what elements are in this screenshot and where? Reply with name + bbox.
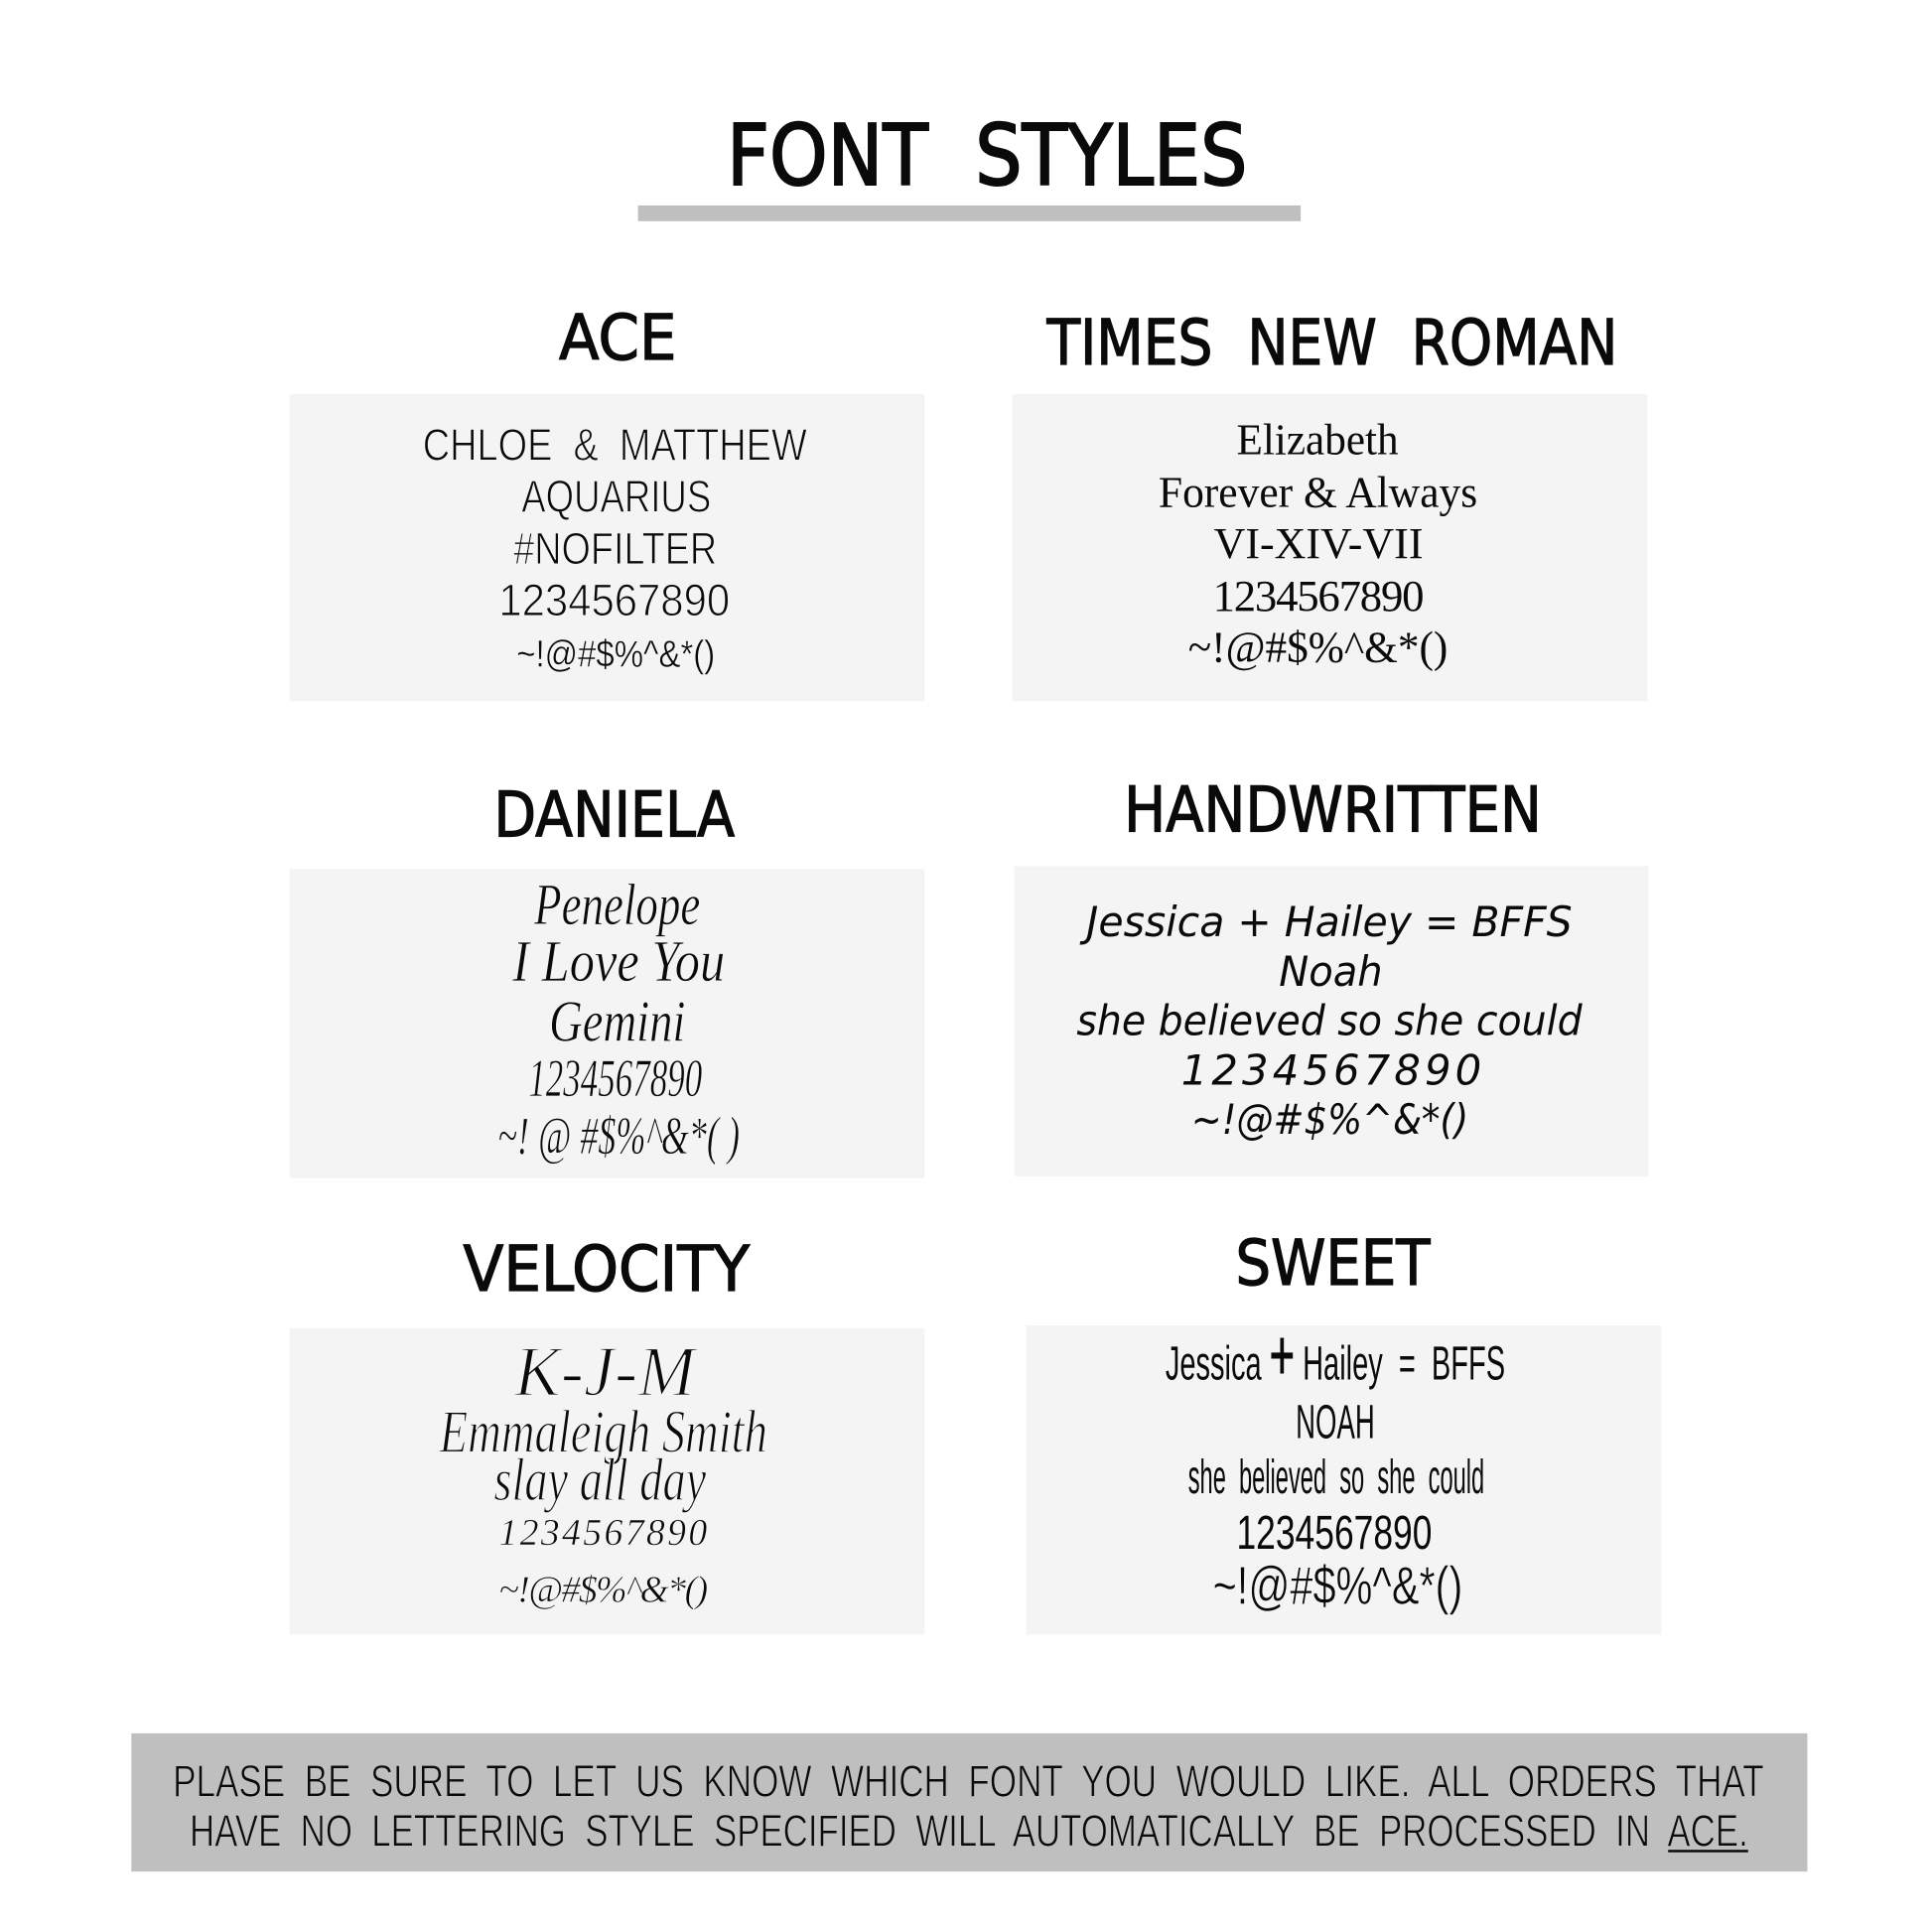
title underline bar bbox=[638, 206, 1301, 221]
panel: VELOCITY bbox=[289, 1232, 924, 1634]
sample text: SWEET: NOAH bbox=[1296, 1396, 1375, 1449]
sample text: VELOCITY: slay all day bbox=[493, 1447, 707, 1514]
sample text: DANIELA: Gemini bbox=[549, 989, 685, 1054]
sample text: HANDWRITTEN: she believed so she could bbox=[1076, 997, 1583, 1045]
sample box: VELOCITY bbox=[289, 1328, 924, 1634]
sample text: SWEET: ~!@#$%^&*() bbox=[1213, 1557, 1462, 1616]
callout: note bbox=[131, 1733, 1807, 1871]
sample text: VELOCITY: Emmaleigh Smith bbox=[439, 1398, 767, 1465]
sample text: VELOCITY: K-J-M bbox=[513, 1333, 699, 1412]
sample text: TIMES NEW ROMAN: 1234567890 bbox=[1213, 571, 1424, 621]
sample box: TIMES NEW ROMAN bbox=[1013, 394, 1647, 701]
heading: ACE: ACE bbox=[559, 301, 676, 374]
sample text: SWEET: Jessica + Hailey = BFFS bbox=[1166, 1316, 1505, 1396]
sample text: TIMES NEW ROMAN: Forever & Always bbox=[1159, 467, 1477, 516]
panel: HANDWRITTEN bbox=[1015, 773, 1648, 1176]
panel: TIMES NEW ROMAN bbox=[1013, 306, 1647, 701]
panel: ACE bbox=[289, 301, 924, 701]
sample text: DANIELA: I Love You bbox=[511, 928, 725, 994]
sample text: HANDWRITTEN: Jessica + Hailey = BFFS bbox=[1079, 897, 1573, 946]
sample text: VELOCITY bbox=[439, 1333, 767, 1611]
heading: SWEET: SWEET bbox=[1235, 1226, 1431, 1300]
note background bbox=[131, 1733, 1807, 1871]
panel: SWEET bbox=[1027, 1226, 1661, 1634]
sample text: ACE: CHLOE & MATTHEW bbox=[423, 420, 807, 471]
sample text: VELOCITY: 1234567890 bbox=[498, 1512, 707, 1554]
sample text: HANDWRITTEN: Noah bbox=[1279, 947, 1383, 996]
sample box: DANIELA bbox=[289, 869, 924, 1178]
sample text: VELOCITY: ~!@#$%^&*() bbox=[498, 1570, 708, 1611]
sample text: DANIELA: ~! @ #$%^&*( ) bbox=[497, 1106, 740, 1166]
title: FONT STYLES bbox=[727, 107, 1247, 206]
sample text: HANDWRITTEN: ~!@#$%^&*() bbox=[1191, 1095, 1468, 1144]
sample text: HANDWRITTEN: 1234567890 bbox=[1181, 1045, 1481, 1094]
sample text: SWEET: she believed so she could bbox=[1188, 1451, 1484, 1504]
sample box: ACE bbox=[289, 394, 924, 701]
sample box: SWEET bbox=[1027, 1325, 1661, 1634]
sample text: SWEET: 1234567890 bbox=[1236, 1507, 1432, 1560]
sample text: ACE: #NOFILTER bbox=[513, 523, 717, 574]
heading: TIMES NEW ROMAN: TIMES NEW ROMAN bbox=[1046, 306, 1617, 379]
sample text: HANDWRITTEN bbox=[1076, 897, 1583, 1144]
sample text: SWEET bbox=[1166, 1316, 1505, 1616]
ACE underline bbox=[1668, 1850, 1748, 1853]
sample text: TIMES NEW ROMAN: Elizabeth bbox=[1236, 415, 1399, 465]
sample text: ACE: 1234567890 bbox=[498, 575, 730, 625]
sample text: DANIELA: 1234567890 bbox=[528, 1048, 702, 1108]
sample text: DANIELA bbox=[497, 872, 740, 1166]
heading: VELOCITY: VELOCITY bbox=[464, 1232, 750, 1306]
sample text: ACE bbox=[423, 420, 807, 675]
heading: HANDWRITTEN: HANDWRITTEN bbox=[1124, 773, 1542, 847]
sample text: TIMES NEW ROMAN: VI-XIV-VII bbox=[1214, 518, 1423, 568]
sample text: ACE: ~!@#$%^&*() bbox=[516, 633, 715, 675]
sample box: HANDWRITTEN bbox=[1015, 866, 1648, 1176]
sample text: TIMES NEW ROMAN bbox=[1159, 415, 1477, 672]
sample text: ACE: AQUARIUS bbox=[521, 471, 711, 521]
sample text: DANIELA: Penelope bbox=[533, 872, 700, 937]
panel: DANIELA bbox=[289, 778, 924, 1178]
sample text: TIMES NEW ROMAN: ~!@#$%^&*() bbox=[1188, 622, 1448, 672]
heading: DANIELA: DANIELA bbox=[493, 778, 735, 852]
